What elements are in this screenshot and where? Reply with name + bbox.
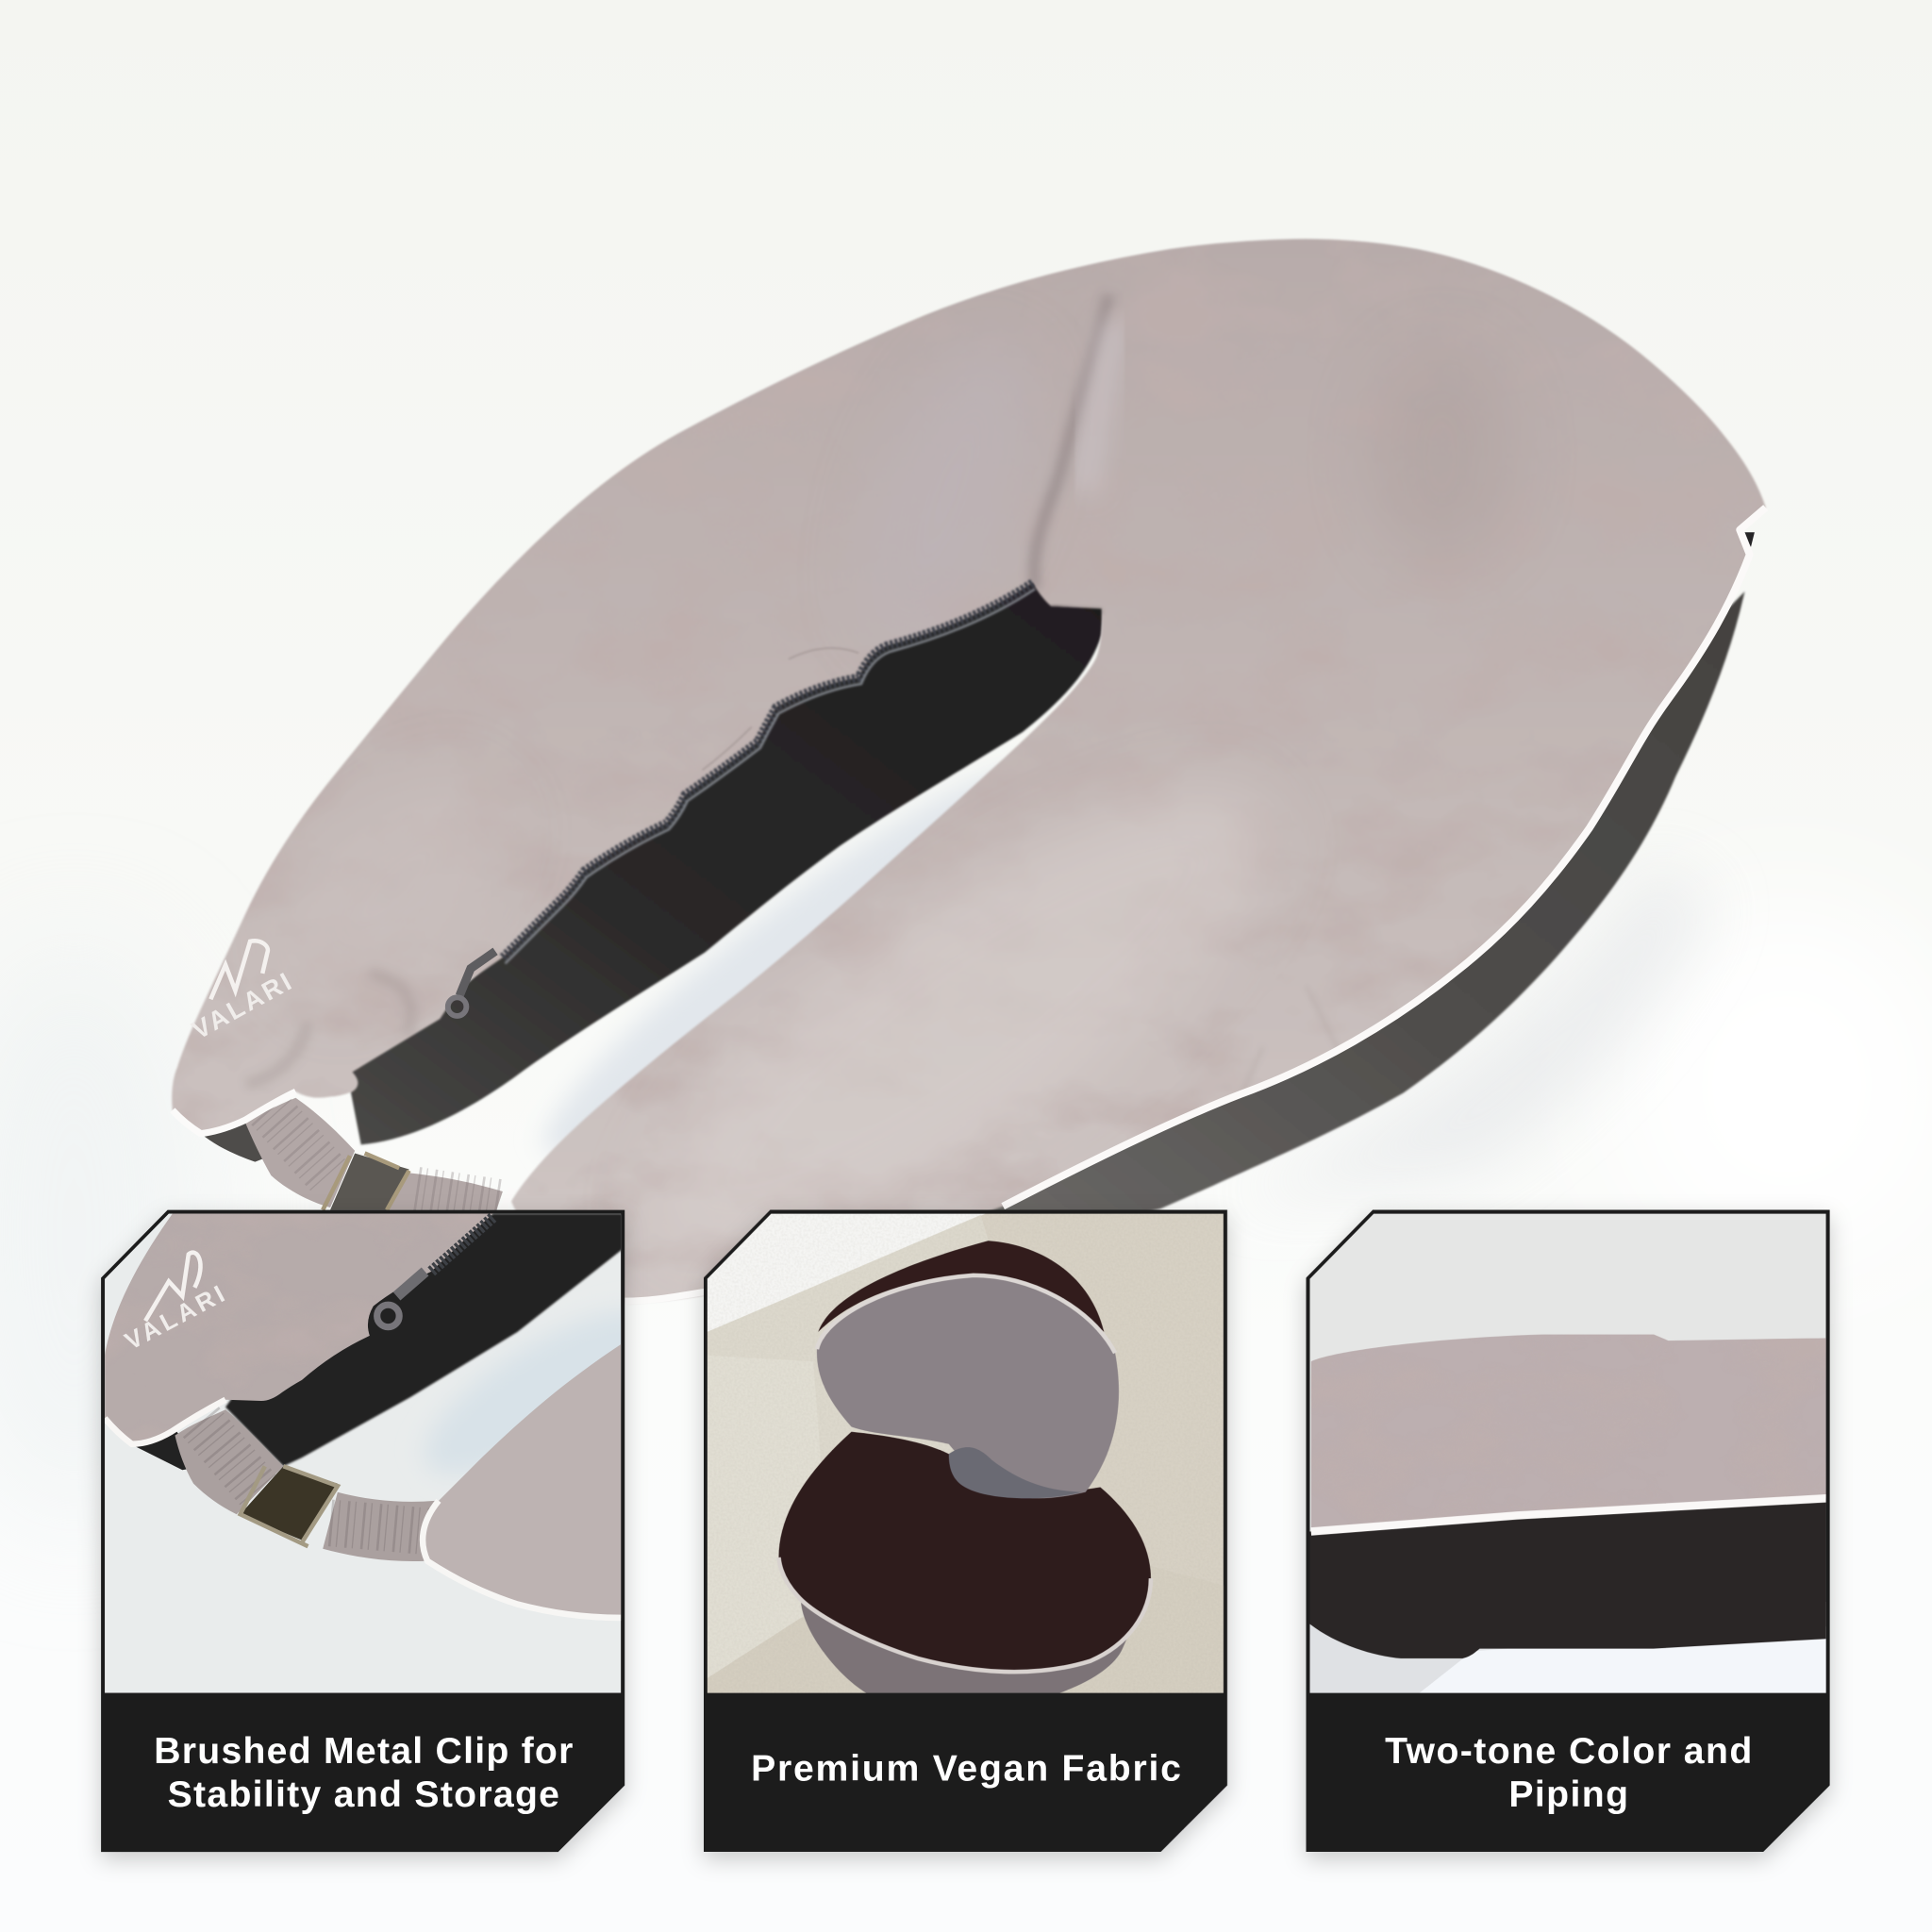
card 2: vegan fabric: [704, 1210, 1227, 1852]
zipper pull: [448, 951, 495, 1016]
metal clip: [323, 1154, 409, 1210]
card 3 caption: Two-tone Color and: [1385, 1731, 1752, 1772]
card 1 photo: [105, 1213, 621, 1693]
logo on pillow: VALARI: [187, 967, 296, 1045]
dark piece under left tip: [201, 1115, 295, 1162]
card 2 caption: Premium Vegan Fabric: [751, 1748, 1181, 1789]
notch at far right: [1742, 532, 1755, 547]
white piping left tip: [173, 1091, 295, 1134]
infographic canvas: [85, 238, 1865, 1867]
card 2 photo: [708, 1214, 1224, 1694]
card 3: two-tone piping: [1306, 1210, 1830, 1852]
card 1 caption: [154, 1731, 573, 1815]
white piping right edge: [1003, 508, 1766, 1207]
card 3 caption: Piping: [1508, 1774, 1628, 1815]
main pillow: [148, 222, 1787, 1330]
zipper teeth: [503, 583, 1035, 963]
card 3 photo: [1306, 1214, 1830, 1694]
card 1 caption: Brushed Metal Clip for: [154, 1731, 573, 1772]
elastic strap: [245, 1098, 503, 1210]
white piping arm tip: [503, 1188, 708, 1301]
card 1: metal clip: [101, 1210, 682, 1852]
pillow light surface: [148, 222, 1787, 1330]
card 3 caption: [1385, 1731, 1752, 1815]
card 1 photo: VALARI: [120, 1279, 229, 1356]
card 1 caption: Stability and Storage: [168, 1774, 559, 1815]
pillow dark underside right: [961, 591, 1744, 1232]
pillow dark inner left: [345, 573, 1104, 1144]
